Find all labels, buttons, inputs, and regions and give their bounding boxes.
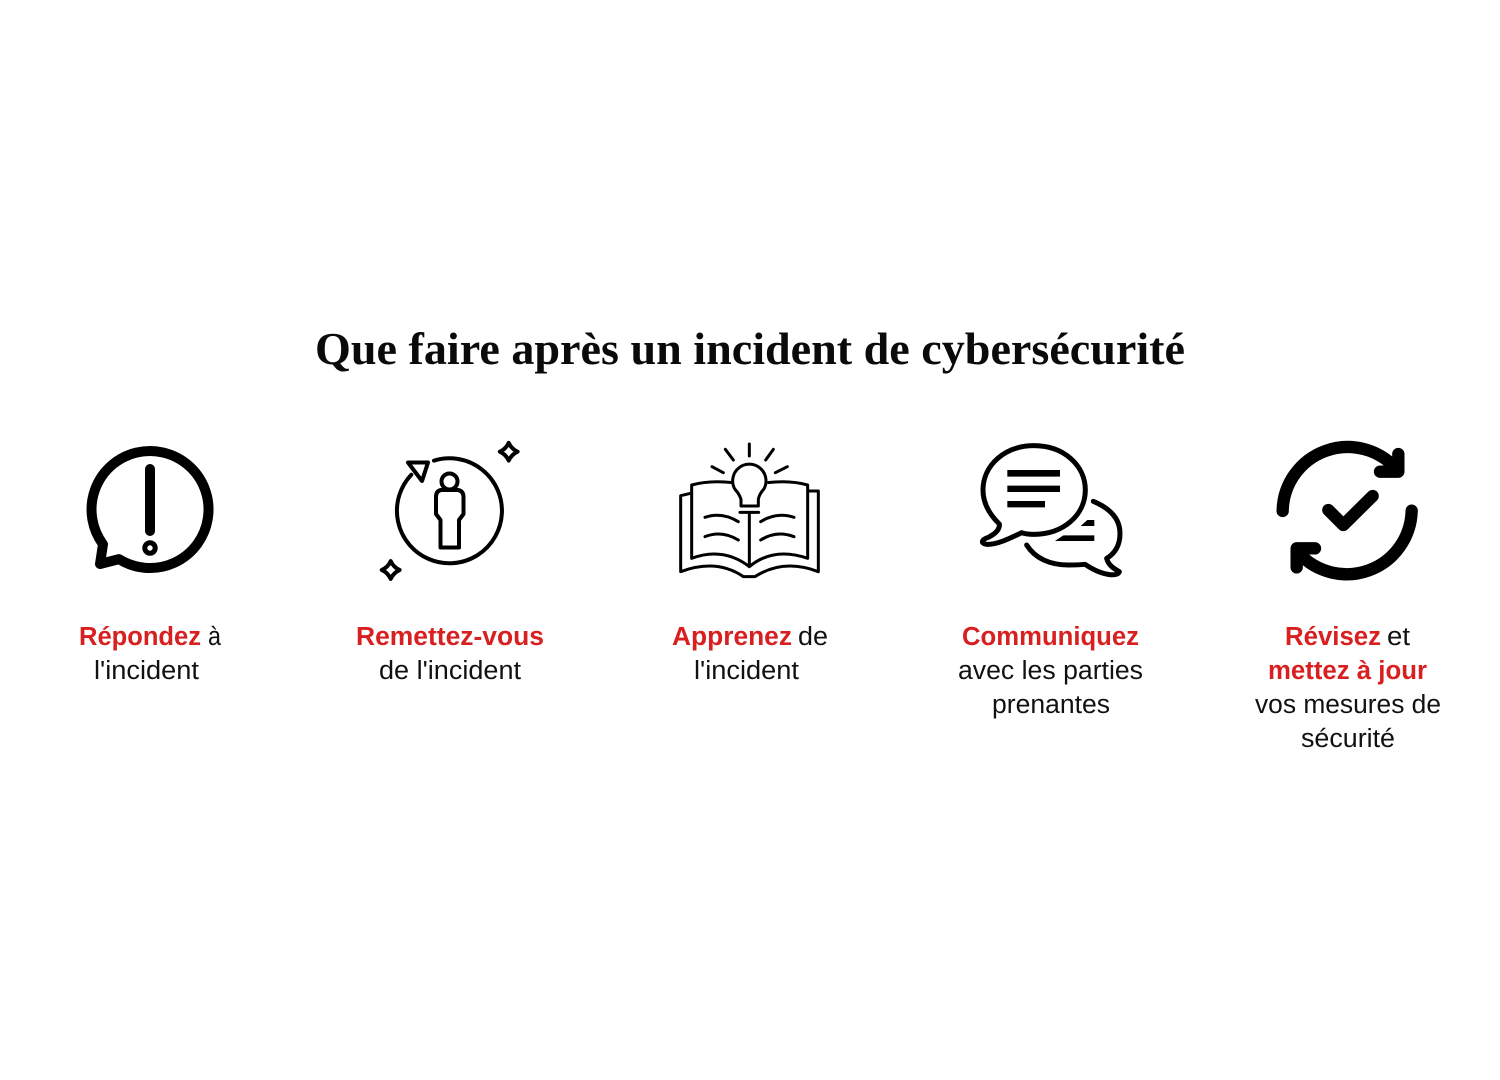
title: Que faire après un incident de cybersécurité: [315, 324, 1185, 374]
label: respond: Répondez: [79, 623, 201, 651]
label: review and update: Révisez: [1285, 623, 1381, 651]
label: review and update: vos mesures de: [1255, 691, 1441, 719]
icon: speech bubble with exclamation mark: [92, 451, 209, 568]
icon: two chat bubbles: [982, 446, 1120, 575]
label: communicate: avec les parties: [958, 657, 1143, 685]
label: respond: à: [208, 623, 222, 651]
icon: person in circular arrow with sparkles: [382, 443, 518, 579]
step 5: review and update: [1255, 447, 1441, 753]
label: learn: Apprenez: [672, 623, 792, 651]
label: communicate: prenantes: [992, 691, 1110, 719]
label: recover: de l'incident: [379, 657, 521, 685]
step 4: communicate: [958, 446, 1143, 719]
label: learn: [672, 623, 828, 685]
label: respond: [79, 623, 222, 685]
step 2: recover: [356, 443, 544, 685]
label: review and update: sécurité: [1301, 725, 1395, 753]
step 3: learn: [672, 444, 828, 685]
label: recover: [356, 623, 544, 685]
icon: open book with light bulb: [681, 444, 818, 577]
icon: circular arrows with check mark: [1283, 447, 1412, 574]
step 1: respond: [79, 451, 222, 685]
label: recover: Remettez-vous: [356, 623, 544, 651]
label: learn: l'incident: [694, 657, 799, 685]
label: communicate: Communiquez: [962, 623, 1139, 651]
label: review and update: et: [1387, 623, 1410, 651]
label: learn: de: [798, 623, 828, 651]
label: review and update: [1255, 623, 1441, 753]
label: communicate: [958, 623, 1143, 719]
label: respond: l'incident: [94, 657, 199, 685]
label: review and update: mettez à jour: [1268, 657, 1427, 685]
